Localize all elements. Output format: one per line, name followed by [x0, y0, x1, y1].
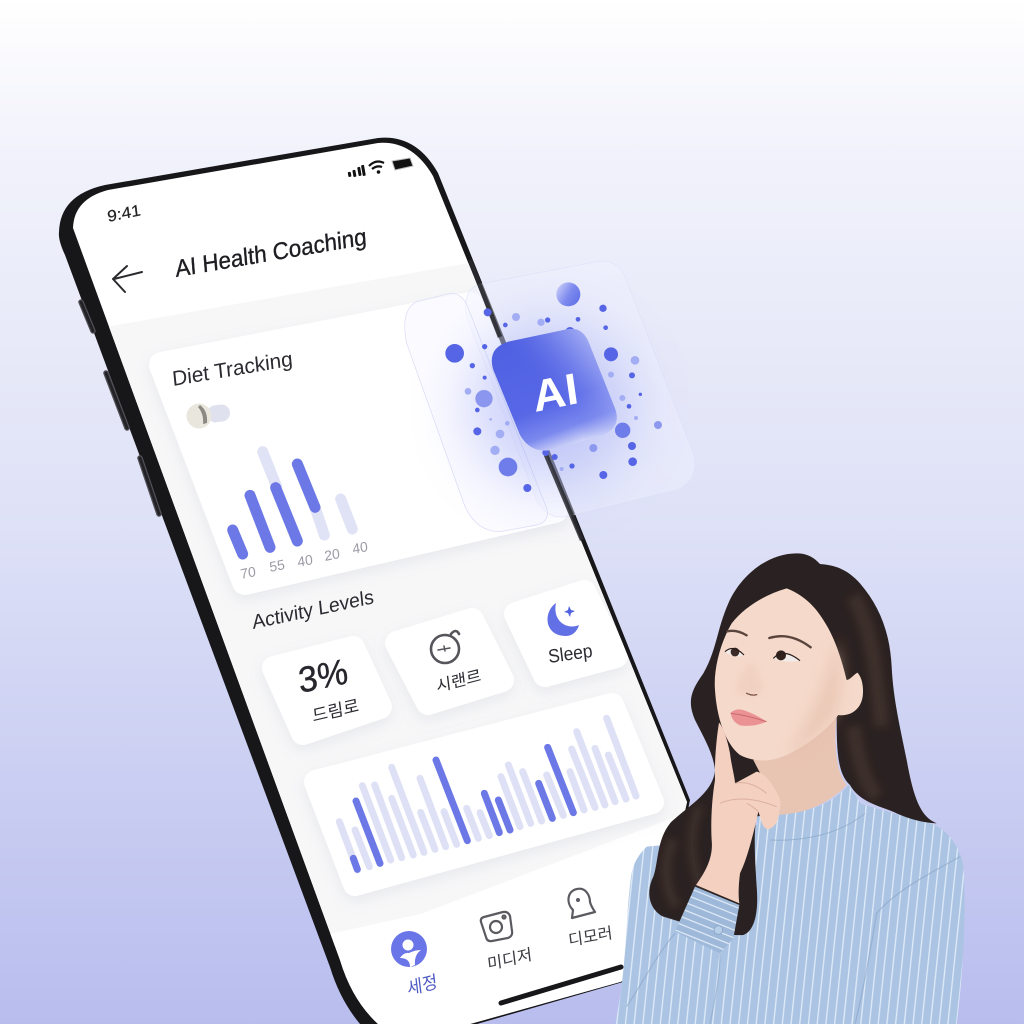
- nav item: monitor: [567, 889, 614, 950]
- heading: diet tracking: Diet Tracking: [171, 348, 294, 391]
- sweater body: [615, 803, 965, 1024]
- sleep label: Sleep: [547, 640, 594, 667]
- diet chart axis labels: 40: [296, 551, 314, 570]
- back arrow: [113, 266, 142, 292]
- tile: sleep: [516, 592, 616, 675]
- icon: stopwatch: [431, 631, 459, 663]
- label: 세정: [406, 972, 439, 999]
- face: [715, 588, 863, 760]
- panel: activity bar chart: [316, 705, 652, 884]
- AI label: AI: [530, 364, 581, 422]
- side buttons: [81, 302, 159, 514]
- diet chart axis labels: 55: [268, 556, 286, 575]
- AI badge with glass panels: [405, 260, 695, 540]
- stat label: 드림로: [311, 696, 360, 726]
- tile: 3 percent: [274, 648, 380, 733]
- stat value: 3%: [296, 650, 350, 701]
- panel: diet tracking card: [162, 305, 555, 582]
- AI tile: [492, 329, 617, 451]
- nav item: media: [481, 912, 533, 974]
- phone body: [59, 138, 690, 1024]
- tile: timer: [397, 620, 502, 703]
- nose: [737, 663, 763, 697]
- facial features: [725, 631, 811, 726]
- label: 미디저: [486, 946, 533, 974]
- hair highlights: [666, 597, 882, 907]
- label: 디모러: [567, 924, 614, 950]
- phone mockup: [59, 138, 720, 1024]
- phone edge seen through glass: [470, 260, 582, 540]
- diet chart axis labels: [240, 542, 368, 578]
- activity bars: [339, 718, 636, 870]
- food toggle icon: [186, 403, 231, 428]
- blue glow: [470, 325, 630, 485]
- title: AI Health Coaching: [174, 223, 368, 283]
- nav item: active profile: [391, 931, 436, 994]
- hair: [649, 553, 937, 935]
- bottom navigation panel: [330, 934, 622, 1024]
- particle dots: solid: [445, 305, 642, 492]
- home indicator: [501, 967, 621, 1003]
- sleeve seams: [627, 857, 960, 1024]
- finger creases: [720, 783, 777, 812]
- eyebrows: [727, 631, 747, 635]
- woman thinking: [615, 553, 965, 1024]
- eyes: [725, 649, 744, 657]
- particle dots: pale: [465, 313, 662, 471]
- content background: [108, 263, 687, 946]
- hand: [696, 723, 781, 903]
- cheek shading: [787, 640, 841, 755]
- neck: [740, 713, 847, 817]
- turtleneck collar: [757, 785, 865, 840]
- glass panel: back: [466, 261, 695, 517]
- diet chart axis labels: 70: [239, 563, 257, 582]
- diet bar chart: [233, 452, 352, 554]
- particle dots: medium: [475, 390, 630, 476]
- phone screen: [73, 143, 687, 1024]
- diet chart axis labels: 40: [351, 538, 369, 557]
- glass panel: front: [405, 293, 547, 532]
- timer label: 시랜르: [435, 667, 482, 696]
- large gradient sphere: [556, 282, 580, 306]
- sweater cuff: [675, 887, 739, 953]
- icon: moon and star: [548, 603, 579, 636]
- status bar time: 9:41: [106, 202, 142, 226]
- icon: profile circle: [391, 931, 427, 967]
- heading: activity levels: Activity Levels: [251, 586, 375, 634]
- status icons: [348, 158, 413, 177]
- collar seam: [770, 813, 865, 840]
- icon: camera: [481, 912, 512, 941]
- cuff button: [714, 926, 723, 934]
- diet chart axis labels: 20: [323, 545, 341, 564]
- icon: speech ghost: [568, 889, 595, 918]
- screen contents: [108, 158, 687, 1024]
- lips: [731, 709, 767, 726]
